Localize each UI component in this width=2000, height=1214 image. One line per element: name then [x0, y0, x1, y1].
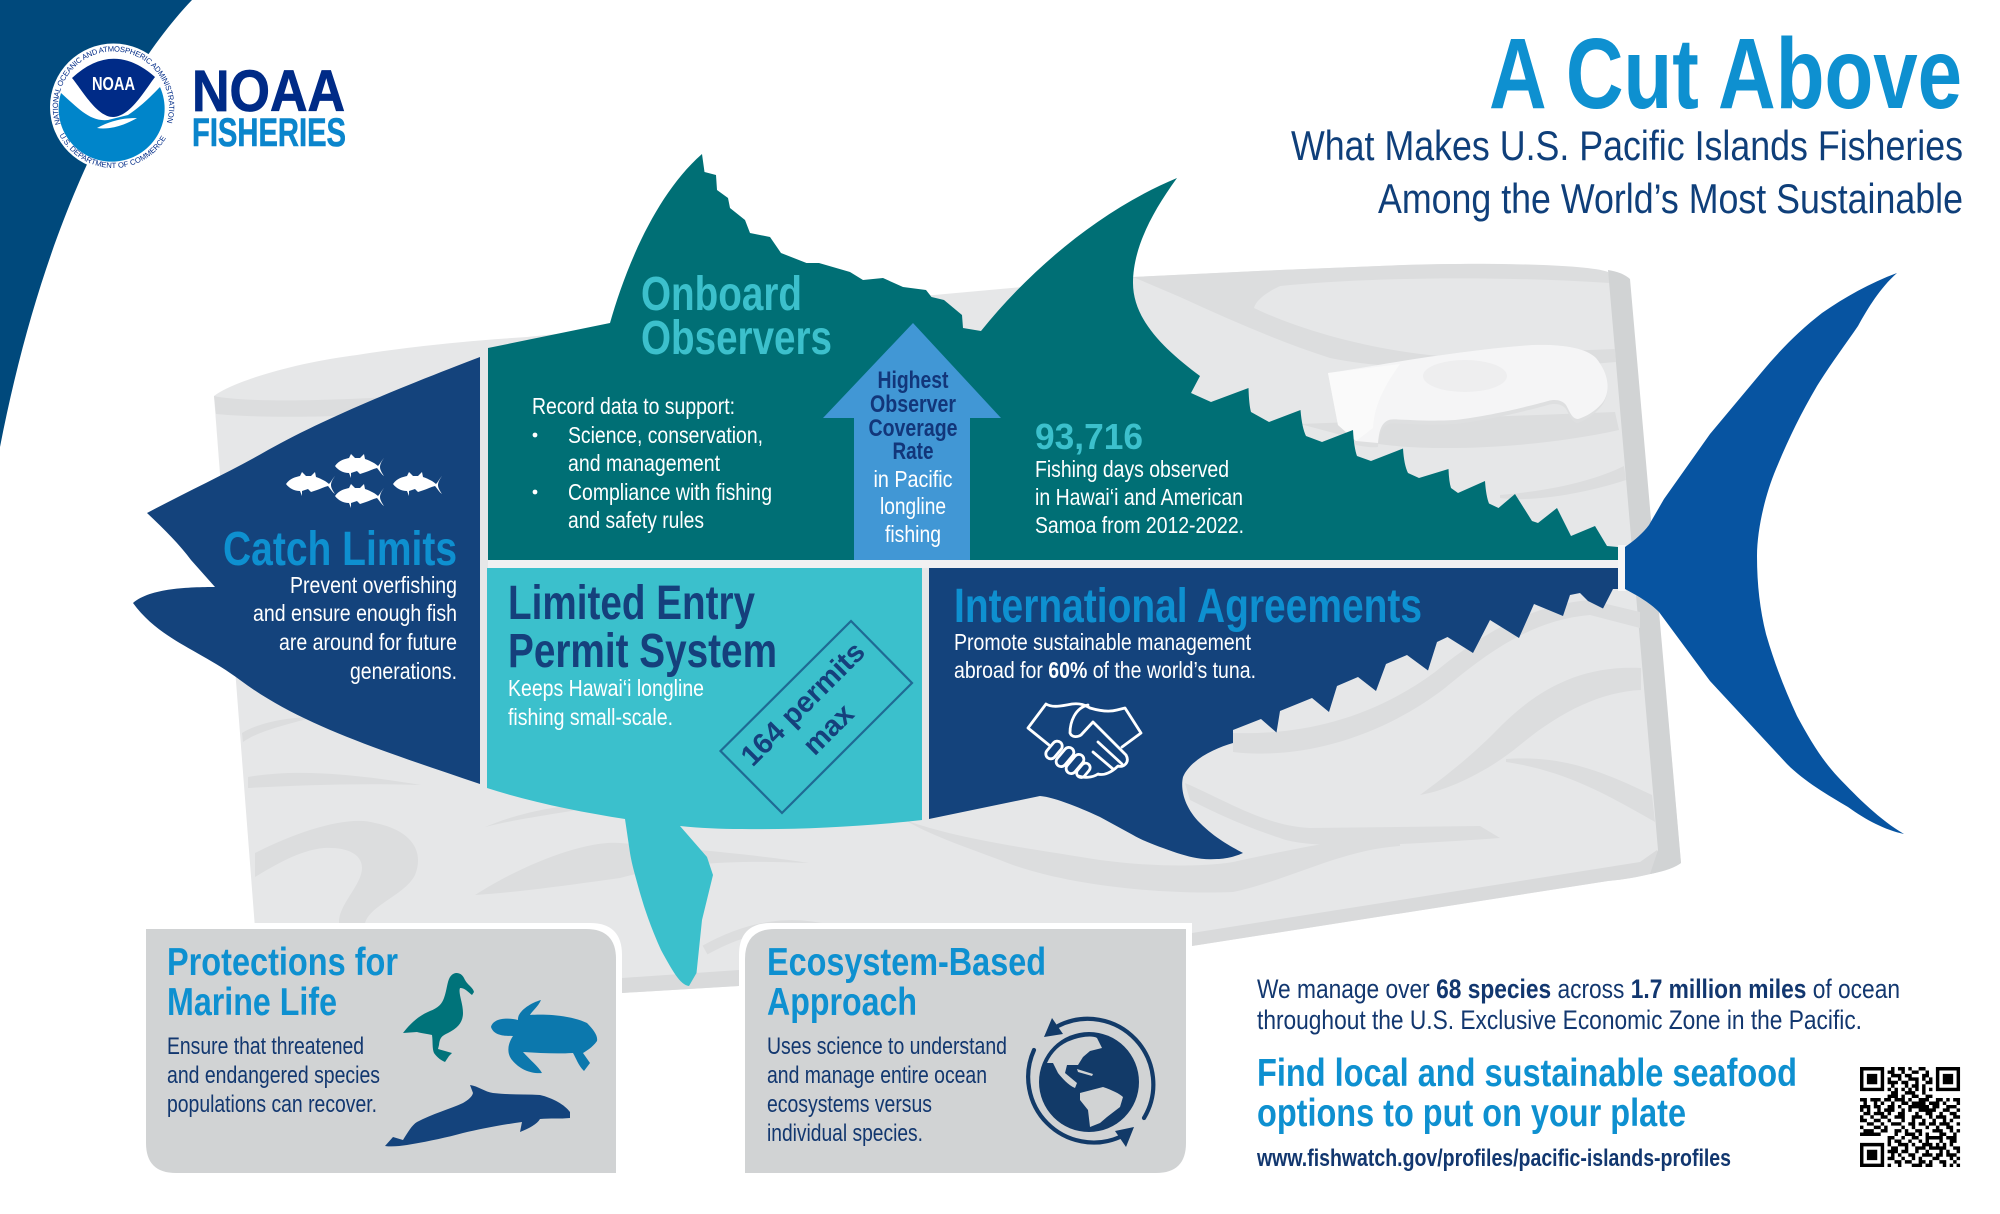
icon: handshake: [1028, 704, 1141, 779]
icon: knife handle: [1328, 345, 1608, 447]
text: international agreements body: [954, 629, 1256, 683]
stat: 93,716 fishing days: Fishing days observed: [1035, 456, 1229, 482]
arrow: highest observer coverage: Rate: [892, 438, 934, 465]
panel: ecosystem-based approach: [739, 923, 1192, 1173]
text: ecosystem body: individual species.: [767, 1120, 923, 1147]
call to action: options to put on your plate: [1257, 1092, 1686, 1135]
stat: 93,716 fishing days: 93,716: [1035, 416, 1143, 457]
text: limited entry body: [508, 675, 704, 730]
panel: onboard observers (upper body): [488, 154, 1618, 560]
heading: protections for marine life: Protections for: [167, 941, 398, 984]
arrow: highest observer coverage: Coverage: [868, 415, 958, 442]
heading: ecosystem-based approach: [767, 941, 1046, 1024]
heading: ecosystem-based approach: Ecosystem-Based: [767, 941, 1046, 984]
heading: onboard observers: Observers: [641, 312, 832, 365]
link: fishwatch url: www.fishwatch.gov/profiles/pacific-islands-profiles: [1256, 1145, 1731, 1172]
text: species and ocean statement: We manage over 68 species across 1.7 million miles of ocean: [1257, 974, 1900, 1004]
cutting board: [214, 264, 1681, 993]
heading: onboard observers: Onboard: [641, 268, 802, 321]
stamp: 164 permits max: 164 permits: [735, 636, 872, 773]
logo: NOAA seal: [50, 44, 174, 168]
text: record data list: Compliance with fishing: [568, 479, 772, 505]
stat: 93,716 fishing days: Samoa from 2012-2022.: [1035, 512, 1244, 538]
heading: limited entry permit system: Permit System: [508, 625, 777, 678]
text: catch limits body: and ensure enough fish: [253, 600, 457, 626]
icon: albatross: [403, 973, 474, 1062]
arrow: highest observer coverage: fishing: [885, 521, 941, 547]
icon: school of tuna: [286, 454, 442, 508]
panel: protections for marine life: [146, 923, 622, 1173]
heading: catch limits: Catch Limits: [223, 523, 457, 576]
stamp: 164 permits max: [720, 621, 912, 813]
text: species and ocean statement: [1257, 974, 1900, 1035]
text: limited entry body: Keeps Hawai‘i longline: [508, 675, 704, 701]
text: international agreements body: Promote sustainable management: [954, 629, 1251, 655]
arrow: highest observer coverage: [823, 323, 1001, 560]
logo: NOAA seal: NATIONAL OCEANIC AND ATMOSPHERIC ADMINISTRATION: [52, 46, 174, 125]
text: ecosystem body: ecosystems versus: [767, 1091, 932, 1118]
arrow: highest observer coverage: Highest: [878, 367, 948, 394]
icon: sea turtle: [491, 1000, 597, 1073]
text: catch limits body: are around for future: [279, 629, 457, 655]
heading: protections for marine life: Marine Life: [167, 981, 337, 1024]
text: protections body: and endangered species: [167, 1062, 380, 1089]
text: ecosystem body: and manage entire ocean: [767, 1062, 987, 1089]
panel: international agreements (lower body): [929, 568, 1618, 859]
text: record data list: [532, 393, 772, 533]
logo: NOAA seal: NOAA: [92, 74, 135, 94]
text: record data list: Science, conservation,: [568, 422, 763, 448]
logo: NOAA seal: U.S. DEPARTMENT OF COMMERCE: [60, 132, 166, 168]
text: record data list: Record data to support:: [532, 393, 735, 419]
text: ecosystem body: [767, 1033, 1007, 1147]
logo: NOAA Fisheries wordmark: NOAA: [192, 59, 345, 124]
text: record data list: and management: [568, 450, 720, 476]
stat: 93,716 fishing days: in Hawai‘i and American: [1035, 484, 1243, 510]
text: catch limits body: [253, 572, 457, 684]
panel: catch limits (fish head): [133, 357, 480, 784]
logo: NOAA Fisheries wordmark: FISHERIES: [192, 111, 346, 155]
corner swoosh: [0, 0, 192, 447]
call to action: Find local and sustainable seafood: [1257, 1052, 1797, 1095]
text: catch limits body: generations.: [350, 658, 457, 684]
text: protections body: [167, 1033, 380, 1118]
heading: ecosystem-based approach: Approach: [767, 981, 917, 1024]
panel: limited entry permit system (belly): [487, 568, 922, 986]
icon: dolphin: [385, 1085, 570, 1146]
subtitle: [1291, 122, 1963, 222]
heading: limited entry permit system: Limited Entry: [508, 577, 755, 630]
heading: international agreements: International Agreements: [954, 580, 1422, 633]
text: international agreements body: abroad for 60% of the world’s tuna.: [954, 657, 1256, 683]
heading: onboard observers: [641, 268, 832, 365]
arrow: highest observer coverage: in Pacific: [874, 466, 953, 492]
stamp: 164 permits max: max: [797, 698, 861, 762]
stat: 93,716 fishing days: [1035, 416, 1244, 538]
arrow: highest observer coverage: Observer: [870, 391, 956, 418]
text: species and ocean statement: throughout the U.S. Exclusive Economic Zone in the Pacific.: [1257, 1005, 1862, 1035]
heading: protections for marine life: [167, 941, 398, 1024]
heading: limited entry permit system: [508, 577, 777, 678]
icon: tuna tail: [1625, 273, 1904, 834]
QR code: [1860, 1067, 1960, 1167]
text: protections body: populations can recover.: [167, 1091, 377, 1118]
arrow: highest observer coverage: longline: [880, 493, 946, 519]
text: record data list: and safety rules: [568, 507, 704, 533]
text: catch limits body: Prevent overfishing: [290, 572, 457, 598]
call to action: [1257, 1052, 1797, 1135]
icon: globe with cycle arrows: [1028, 1018, 1153, 1147]
text: limited entry body: fishing small-scale.: [508, 704, 673, 730]
text: protections body: Ensure that threatened: [167, 1033, 364, 1060]
text: ecosystem body: Uses science to understand: [767, 1033, 1007, 1060]
logo: NOAA Fisheries wordmark: [192, 59, 346, 155]
